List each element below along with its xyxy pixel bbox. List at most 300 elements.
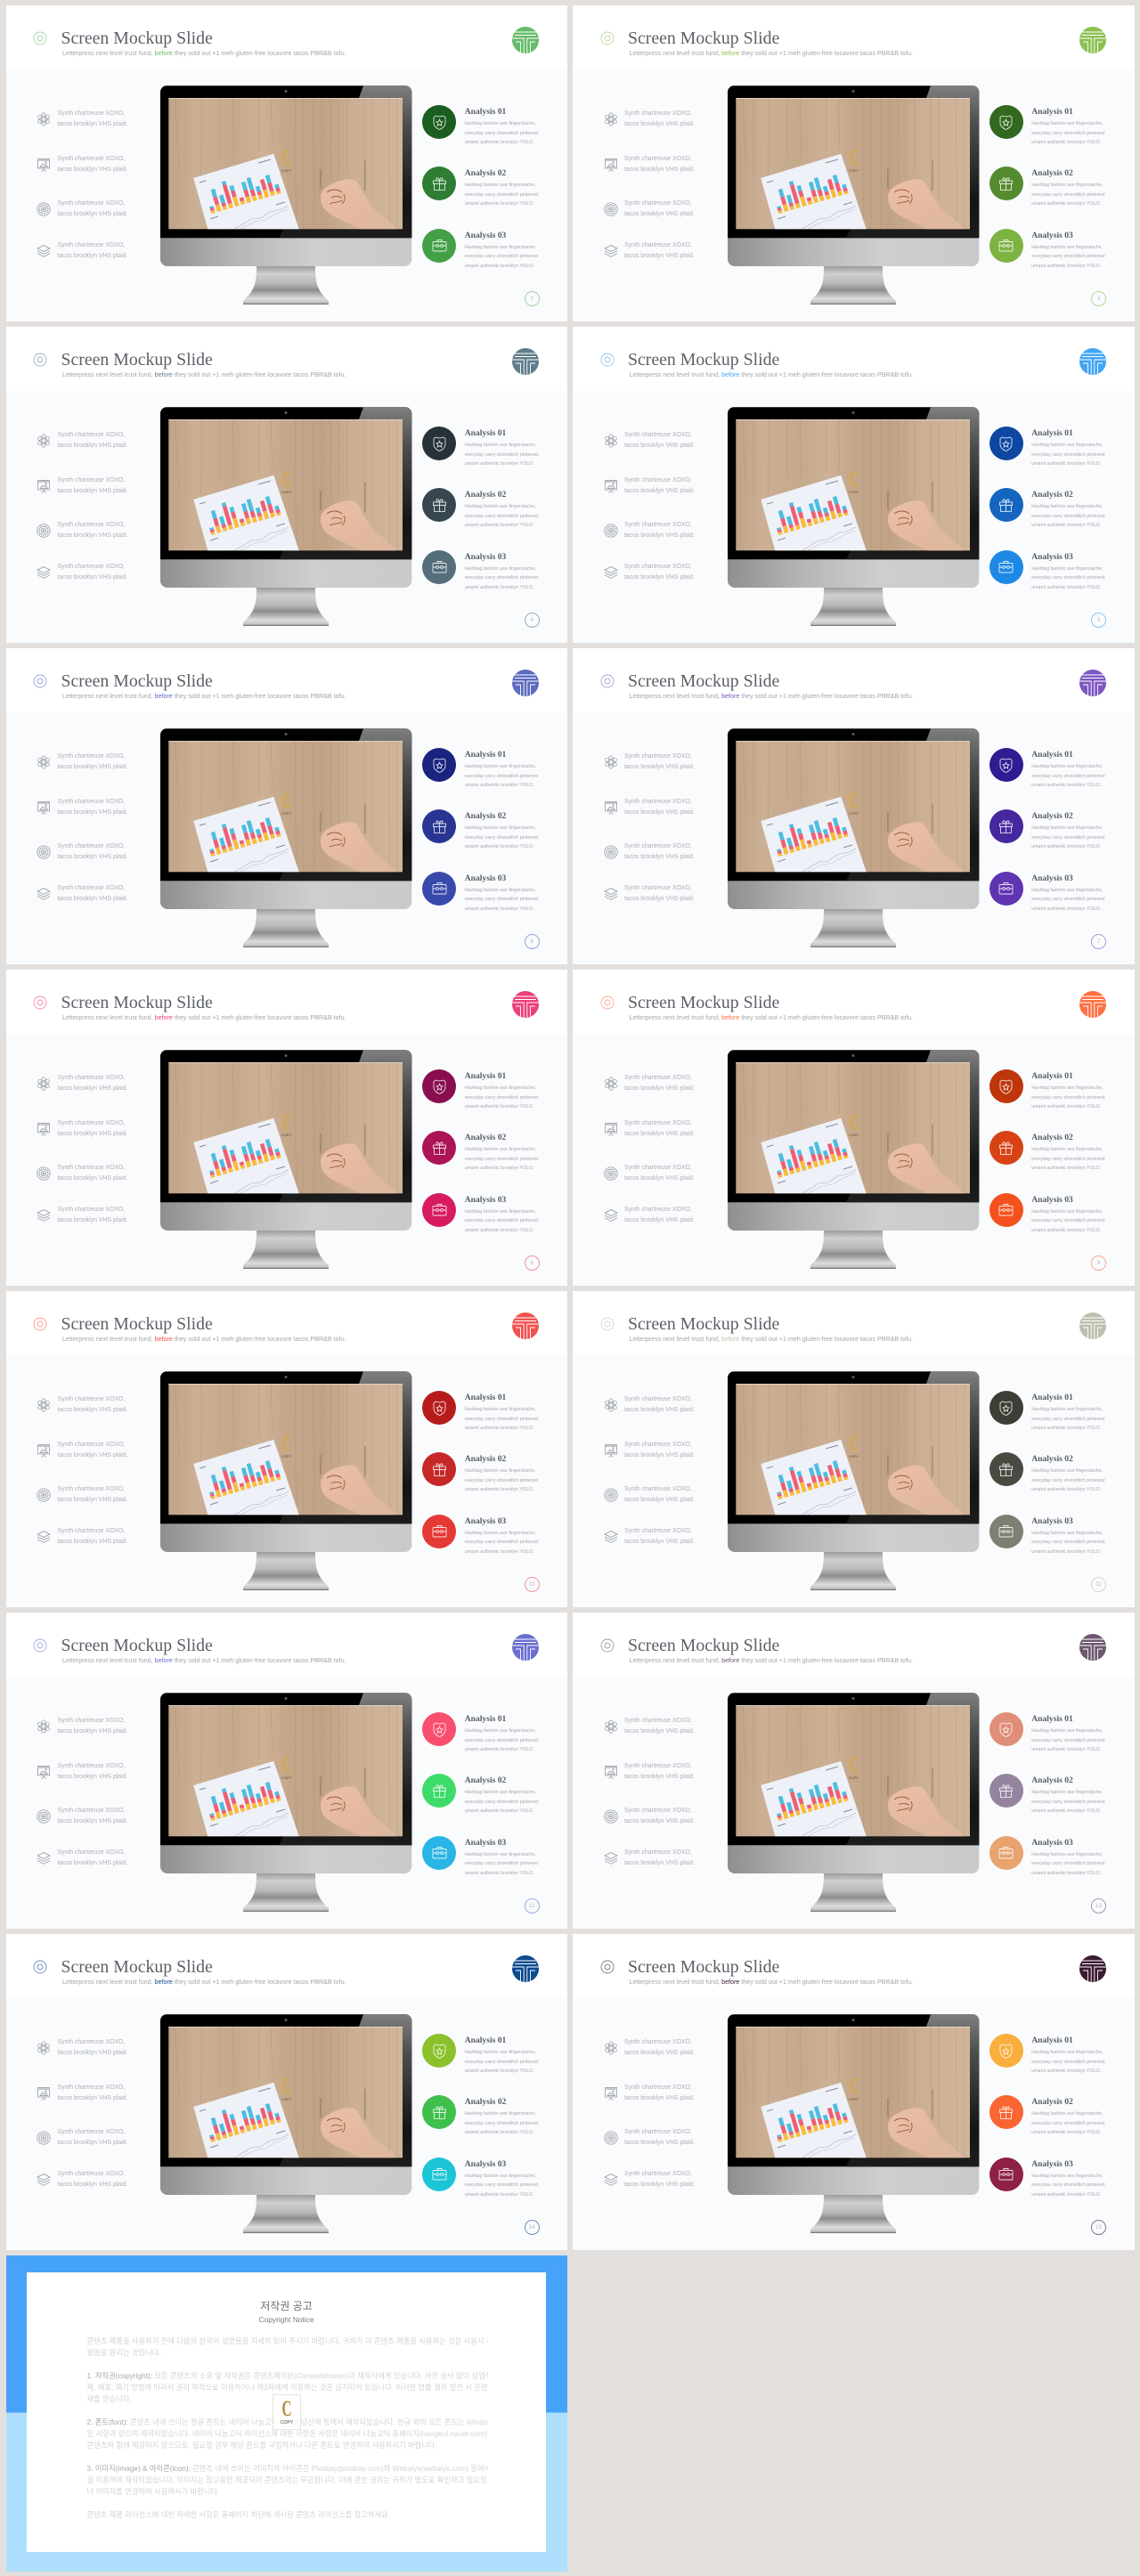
monitor mockup [728, 407, 980, 626]
paragraph: image and icon: 나 이미지를 변경하여 사용하시기 바랍니다. [87, 2486, 219, 2495]
monitor mockup: C [282, 1110, 290, 1134]
analysis 02: Analysis 02 [1031, 2097, 1073, 2107]
analysis 03: everyday carry shoreditch pinterest [1031, 254, 1105, 259]
feature item 2 [604, 2082, 705, 2105]
feature item 3 [604, 1483, 705, 1507]
analysis 01 [989, 1069, 1123, 1123]
monitor mockup: COPY [848, 168, 859, 173]
analysis 03: Analysis 03 [465, 230, 506, 240]
analysis 01 [989, 1391, 1123, 1444]
analysis 02 [989, 809, 1123, 863]
feature item 1: tacos brooklyn VHS plaid. [624, 443, 695, 449]
watermark badge: C [281, 2397, 292, 2420]
analysis 03: Hashtag fashion axe fingerstache, [1031, 1530, 1103, 1535]
icon: logo [1079, 348, 1106, 375]
feature item 4: tacos brooklyn VHS plaid. [624, 574, 695, 581]
paragraph: image and icon [87, 2463, 488, 2497]
feature item 3: tacos brooklyn VHS plaid. [57, 2140, 127, 2146]
feature item 4 [604, 242, 695, 259]
feature item 2: Synth chartreuse XOXO, [624, 798, 692, 805]
panel: copyright notice [5, 2255, 567, 2572]
slide 6 panel: indigo [5, 648, 567, 964]
analysis 03 [422, 1193, 556, 1247]
feature item 3: Synth chartreuse XOXO, [624, 1485, 692, 1492]
analysis 03: everyday carry shoreditch pinterest [1031, 897, 1105, 902]
feature item 3: tacos brooklyn VHS plaid. [624, 1818, 695, 1824]
icon: heading ring [600, 674, 615, 688]
feature item 4: tacos brooklyn VHS plaid. [624, 896, 695, 902]
icon: logo [512, 1955, 539, 1982]
feature item 3: tacos brooklyn VHS plaid. [57, 1497, 127, 1503]
feature item 3: Synth chartreuse XOXO, [624, 199, 692, 207]
feature item 3: tacos brooklyn VHS plaid. [57, 532, 127, 539]
page number [524, 933, 540, 949]
monitor mockup: COPY [281, 811, 291, 816]
analysis 01 [422, 427, 538, 467]
feature item 2: Synth chartreuse XOXO, [57, 1120, 125, 1125]
monitor mockup: COPY [848, 1454, 859, 1459]
feature item 1 [605, 110, 695, 127]
analysis 01: everyday carry shoreditch pinterest [465, 1095, 538, 1101]
feature item 3: Synth chartreuse XOXO, [624, 2128, 692, 2135]
analysis 03: Analysis 03 [1031, 2158, 1073, 2169]
feature item 1: Synth chartreuse XOXO, [624, 1396, 692, 1402]
feature item 4: Synth chartreuse XOXO, [624, 2171, 692, 2177]
feature item 1: tacos brooklyn VHS plaid. [57, 1085, 127, 1092]
analysis 03: umami authentic brooklyn YOLO. [1031, 906, 1101, 912]
analysis 01: Analysis 01 [465, 107, 506, 117]
analysis 02 [422, 809, 556, 863]
analysis 03: everyday carry shoreditch pinterest [465, 575, 538, 581]
page number: 14 [528, 2224, 535, 2230]
analysis 01: umami authentic brooklyn YOLO. [465, 1104, 534, 1109]
subtitle: Letterpress next level trust fund, before they sold out +1 meh gluten-free locavore tacos PBR&B tofu. [629, 693, 913, 700]
feature item 3: Synth chartreuse XOXO, [624, 1165, 692, 1170]
analysis 01: everyday carry shoreditch pinterest [465, 1417, 538, 1422]
feature item 2: tacos brooklyn VHS plaid. [624, 1452, 695, 1459]
feature item 1: tacos brooklyn VHS plaid. [624, 1728, 695, 1735]
analysis 03: everyday carry shoreditch pinterest [465, 254, 538, 259]
analysis 02 [989, 1452, 1123, 1506]
feature item 3: tacos brooklyn VHS plaid. [57, 211, 127, 217]
feature item 4 [604, 883, 705, 906]
feature item 1 [37, 1394, 139, 1417]
analysis 01: Analysis 01 [1031, 750, 1073, 760]
icon: logo [1079, 991, 1106, 1018]
feature item 2: Synth chartreuse XOXO, [57, 477, 125, 483]
feature item 4: Synth chartreuse XOXO, [624, 1528, 692, 1534]
analysis 02: Analysis 02 [465, 1776, 506, 1785]
analysis 01: everyday carry shoreditch pinterest [1031, 1095, 1105, 1101]
icon: logo [1079, 27, 1106, 53]
page number: 11 [1095, 1581, 1102, 1587]
feature item 1 [37, 110, 127, 127]
analysis 03: Analysis 03 [1031, 552, 1073, 561]
page number: 9 [1097, 1259, 1100, 1266]
feature item 4 [37, 883, 139, 906]
analysis 01 [989, 427, 1123, 480]
subtitle: Letterpress next level trust fund, before they sold out +1 meh gluten-free locavore tacos PBR&B tofu. [62, 693, 346, 700]
analysis 01: Analysis 01 [465, 1393, 506, 1402]
subtitle: Letterpress next level trust fund, before they sold out +1 meh gluten-free locavore tacos PBR&B tofu. [629, 1979, 913, 1986]
analysis 03: Analysis 03 [1031, 1516, 1073, 1526]
analysis 02: Hashtag fashion axe fingerstache, [1031, 504, 1103, 509]
feature item 3: tacos brooklyn VHS plaid. [624, 1497, 695, 1503]
analysis 02: Hashtag fashion axe fingerstache, [465, 1790, 536, 1795]
analysis 02: Analysis 02 [465, 1454, 506, 1464]
page number: 13 [1095, 1902, 1102, 1909]
analysis 01: umami authentic brooklyn YOLO. [1031, 1426, 1101, 1431]
analysis 01 [422, 105, 538, 145]
icon: heading ring [33, 674, 47, 688]
analysis 01: Hashtag fashion axe fingerstache, [465, 1407, 536, 1412]
page number: 2 [530, 296, 533, 301]
feature item 1: tacos brooklyn VHS plaid. [624, 1085, 695, 1092]
feature item 4: Synth chartreuse XOXO, [624, 242, 692, 248]
feature item 2 [604, 1439, 705, 1462]
analysis 02: Hashtag fashion axe fingerstache, [465, 2111, 536, 2117]
analysis 03 [989, 1836, 1123, 1889]
analysis 02: umami authentic brooklyn YOLO. [465, 201, 534, 207]
feature item 3 [37, 522, 127, 539]
page number: 7 [1097, 939, 1100, 944]
feature item 2: tacos brooklyn VHS plaid. [624, 2095, 695, 2101]
subtitle: Letterpress next level trust fund, before they sold out +1 meh gluten-free locavore tacos PBR&B tofu. [62, 1979, 346, 1986]
feature item 3 [604, 2126, 705, 2149]
feature item 4: Synth chartreuse XOXO, [57, 885, 125, 891]
analysis 01 [422, 1391, 556, 1444]
analysis 02: umami authentic brooklyn YOLO. [1031, 1166, 1101, 1171]
page number [524, 1255, 540, 1270]
analysis 01 [422, 1069, 556, 1123]
feature item 1: Synth chartreuse XOXO, [624, 2039, 692, 2045]
monitor mockup: COPY [281, 2097, 291, 2101]
feature item 3: tacos brooklyn VHS plaid. [624, 2140, 695, 2146]
analysis 02: Analysis 02 [465, 811, 506, 821]
analysis 03 [989, 1193, 1123, 1247]
page number [1091, 290, 1106, 306]
feature item 1 [37, 1716, 139, 1738]
feature item 2: Synth chartreuse XOXO, [624, 1763, 692, 1768]
analysis 03: everyday carry shoreditch pinterest [465, 897, 538, 902]
analysis 01: Analysis 01 [465, 428, 506, 438]
intro paragraph: 왔음을 알리는 것입니다. [87, 2347, 161, 2356]
analysis 02 [989, 1131, 1123, 1184]
monitor mockup: COPY [848, 1133, 859, 1137]
icon: heading ring [33, 995, 47, 1010]
analysis 03: Analysis 03 [465, 873, 506, 883]
analysis 03: umami authentic brooklyn YOLO. [465, 264, 534, 269]
analysis 02: Hashtag fashion axe fingerstache, [465, 1147, 536, 1152]
feature item 4: tacos brooklyn VHS plaid. [57, 574, 127, 581]
analysis 03: everyday carry shoreditch pinterest [1031, 575, 1105, 581]
feature item 3 [604, 199, 695, 217]
feature item 1 [37, 431, 127, 449]
icon: logo [1079, 1312, 1106, 1339]
analysis 02: Hashtag fashion axe fingerstache, [1031, 1790, 1103, 1795]
monitor mockup [160, 2014, 419, 2241]
analysis 01: Analysis 01 [465, 750, 506, 760]
feature item 2: Synth chartreuse XOXO, [624, 1120, 692, 1125]
feature item 2 [604, 1118, 705, 1140]
analysis 02: umami authentic brooklyn YOLO. [465, 2130, 534, 2135]
feature item 1: Synth chartreuse XOXO, [57, 753, 125, 760]
slide 10 panel: red [5, 1291, 567, 1607]
feature item 2: tacos brooklyn VHS plaid. [57, 2095, 127, 2101]
monitor mockup: C [850, 1110, 857, 1134]
feature item 4 [604, 1205, 705, 1227]
analysis 03: umami authentic brooklyn YOLO. [465, 585, 534, 590]
subtitle: Letterpress next level trust fund, before they sold out +1 meh gluten-free locavore tacos PBR&B tofu. [629, 1657, 913, 1664]
feature item 4: Synth chartreuse XOXO, [57, 564, 125, 570]
analysis 03: everyday carry shoreditch pinterest [1031, 1861, 1105, 1866]
icon: logo [512, 1312, 539, 1339]
analysis 02: everyday carry shoreditch pinterest [1031, 192, 1105, 198]
subtitle: Letterpress next level trust fund, before they sold out +1 meh gluten-free locavore tacos PBR&B tofu. [62, 1657, 346, 1664]
feature item 4 [37, 242, 127, 259]
monitor mockup: C [282, 1753, 290, 1777]
analysis 03 [422, 871, 556, 924]
slide 12 panel: bright multicolour [5, 1613, 567, 1929]
feature item 3: tacos brooklyn VHS plaid. [624, 1175, 695, 1182]
feature item 1: tacos brooklyn VHS plaid. [624, 764, 695, 770]
heading: Screen Mockup Slide [628, 28, 779, 48]
feature item 3: Synth chartreuse XOXO, [57, 2128, 125, 2135]
monitor mockup [160, 1050, 419, 1277]
analysis 01: Hashtag fashion axe fingerstache, [465, 1728, 536, 1734]
analysis 01: umami authentic brooklyn YOLO. [465, 1426, 534, 1431]
icon: logo [512, 670, 539, 696]
feature item 4 [37, 1848, 139, 1870]
analysis 02: everyday carry shoreditch pinterest [1031, 2121, 1105, 2126]
analysis 03 [422, 1836, 556, 1889]
feature item 1: Synth chartreuse XOXO, [624, 1075, 692, 1081]
analysis 03: umami authentic brooklyn YOLO. [1031, 1871, 1101, 1876]
feature item 1: Synth chartreuse XOXO, [57, 110, 125, 117]
feature item 2 [604, 796, 705, 819]
analysis 03 [989, 229, 1105, 269]
analysis 02: everyday carry shoreditch pinterest [1031, 1800, 1105, 1805]
analysis 03: umami authentic brooklyn YOLO. [465, 906, 534, 912]
monitor mockup: COPY [281, 1133, 291, 1137]
feature item 3: tacos brooklyn VHS plaid. [624, 854, 695, 860]
icon: heading ring [600, 1960, 615, 1974]
analysis 03: Hashtag fashion axe fingerstache, [1031, 244, 1103, 249]
analysis 03 [989, 2157, 1123, 2210]
analysis 01: everyday carry shoreditch pinterest [1031, 452, 1105, 458]
feature item 3: tacos brooklyn VHS plaid. [624, 211, 695, 217]
monitor mockup: C [850, 2075, 857, 2099]
analysis 02: umami authentic brooklyn YOLO. [465, 1166, 534, 1171]
slide 2 panel: green [5, 5, 567, 321]
page number: 3 [1097, 296, 1100, 301]
feature item 2 [37, 1439, 139, 1462]
analysis 01: everyday carry shoreditch pinterest [1031, 1738, 1105, 1743]
monitor mockup: COPY [281, 490, 291, 494]
analysis 02 [422, 167, 538, 207]
paragraph: copyright [87, 2370, 488, 2404]
feature item 1 [604, 1716, 705, 1738]
slide 4 panel: slate [5, 327, 567, 643]
icon: logo [512, 348, 539, 375]
analysis 02: Analysis 02 [1031, 168, 1073, 178]
subtitle: Letterpress next level trust fund, before they sold out +1 meh gluten-free locavore tacos PBR&B tofu. [629, 1014, 913, 1021]
feature item 1: Synth chartreuse XOXO, [624, 753, 692, 760]
analysis 02: Hashtag fashion axe fingerstache, [465, 1468, 536, 1474]
analysis 03 [422, 229, 538, 269]
analysis 03: everyday carry shoreditch pinterest [465, 2182, 538, 2188]
monitor mockup: C [850, 146, 857, 170]
analysis 03: umami authentic brooklyn YOLO. [465, 1228, 534, 1233]
feature item 3: tacos brooklyn VHS plaid. [57, 854, 127, 860]
icon: heading ring [600, 995, 615, 1010]
analysis 03 [422, 550, 538, 590]
slide 9 panel: orange [573, 970, 1135, 1286]
monitor mockup [727, 1050, 985, 1277]
feature item 4: tacos brooklyn VHS plaid. [57, 253, 127, 259]
feature item 1: Synth chartreuse XOXO, [624, 432, 692, 438]
analysis 01: Analysis 01 [465, 2036, 506, 2045]
icon: heading ring [34, 353, 46, 367]
monitor mockup: C [282, 146, 290, 170]
analysis 01: Hashtag fashion axe fingerstache, [465, 121, 536, 126]
feature item 4: tacos brooklyn VHS plaid. [57, 896, 127, 902]
analysis 03: umami authentic brooklyn YOLO. [465, 1871, 534, 1876]
analysis 01: Hashtag fashion axe fingerstache, [1031, 764, 1103, 769]
analysis 03: umami authentic brooklyn YOLO. [1031, 1549, 1101, 1555]
analysis 03: umami authentic brooklyn YOLO. [1031, 1228, 1101, 1233]
analysis 02: Analysis 02 [465, 1133, 506, 1142]
intro paragraph [87, 2335, 488, 2358]
feature item 2: Synth chartreuse XOXO, [57, 155, 125, 162]
analysis 02: umami authentic brooklyn YOLO. [1031, 1808, 1101, 1814]
heading: Screen Mockup Slide [628, 993, 779, 1012]
analysis 03: Analysis 03 [465, 1516, 506, 1526]
feature item 1: tacos brooklyn VHS plaid. [57, 121, 127, 127]
feature item 4 [604, 1848, 705, 1870]
feature item 3: tacos brooklyn VHS plaid. [57, 1175, 127, 1182]
analysis 02: umami authentic brooklyn YOLO. [1031, 201, 1101, 207]
analysis 01 [989, 105, 1105, 145]
analysis 01: Hashtag fashion axe fingerstache, [1031, 443, 1103, 448]
analysis 02: umami authentic brooklyn YOLO. [1031, 2130, 1101, 2135]
icon: logo [512, 1634, 539, 1661]
feature item 2: Synth chartreuse XOXO, [624, 1441, 692, 1448]
monitor mockup: COPY [281, 168, 291, 173]
heading: Screen Mockup Slide [61, 993, 213, 1012]
feature item 2: Synth chartreuse XOXO, [624, 155, 692, 162]
feature item 3 [37, 841, 139, 864]
analysis 02: everyday carry shoreditch pinterest [465, 192, 538, 198]
feature item 4: Synth chartreuse XOXO, [57, 1528, 125, 1534]
feature item 4: tacos brooklyn VHS plaid. [624, 1217, 695, 1223]
analysis 02: Hashtag fashion axe fingerstache, [465, 504, 536, 509]
analysis 02: umami authentic brooklyn YOLO. [1031, 523, 1101, 528]
analysis 02: everyday carry shoreditch pinterest [1031, 1157, 1105, 1162]
feature item 3 [604, 841, 705, 864]
feature item 1 [604, 1073, 705, 1095]
copyright white card [27, 2272, 546, 2552]
analysis 02 [989, 2095, 1123, 2149]
analysis 03: Analysis 03 [1031, 230, 1073, 240]
analysis 01: everyday carry shoreditch pinterest [1031, 1417, 1105, 1422]
analysis 03: umami authentic brooklyn YOLO. [465, 1549, 534, 1555]
heading: Screen Mockup Slide [61, 28, 213, 48]
analysis 01: Analysis 01 [1031, 2036, 1073, 2045]
analysis 01: Analysis 01 [1031, 428, 1073, 438]
analysis 01: Analysis 01 [1031, 1071, 1073, 1081]
analysis 02 [422, 488, 538, 528]
analysis 01 [422, 1712, 556, 1766]
feature item 1 [37, 2037, 139, 2060]
analysis 03: Analysis 03 [465, 2158, 506, 2169]
heading: Screen Mockup Slide [61, 1957, 213, 1977]
feature item 1 [604, 752, 705, 774]
icon: logo [512, 991, 539, 1018]
slide 15 panel: plum with amber, orange and crimson [573, 1934, 1135, 2250]
subtitle: Letterpress next level trust fund, before they sold out +1 meh gluten-free locavore tacos PBR&B tofu. [629, 371, 913, 378]
analysis 02 [422, 1452, 556, 1506]
analysis 03: Analysis 03 [1031, 1195, 1073, 1204]
feature item 4: tacos brooklyn VHS plaid. [57, 2182, 127, 2188]
feature item 4 [604, 1526, 705, 1548]
feature item 3: tacos brooklyn VHS plaid. [624, 532, 695, 539]
analysis 02: everyday carry shoreditch pinterest [465, 1478, 538, 1483]
feature item 2: tacos brooklyn VHS plaid. [57, 1131, 127, 1137]
page number [1091, 2219, 1106, 2235]
monitor mockup [160, 407, 411, 626]
feature item 4: Synth chartreuse XOXO, [624, 1207, 692, 1213]
monitor mockup [727, 2014, 985, 2241]
paragraph: font [87, 2417, 488, 2450]
slide 11 panel: khaki grey [573, 1291, 1135, 1607]
analysis 03: Hashtag fashion axe fingerstache, [1031, 2173, 1103, 2178]
page number: 6 [530, 939, 533, 944]
monitor mockup [160, 1693, 419, 1920]
feature item 2: Synth chartreuse XOXO, [624, 2084, 692, 2091]
analysis 02: Hashtag fashion axe fingerstache, [1031, 1147, 1103, 1152]
analysis 01: Hashtag fashion axe fingerstache, [465, 764, 536, 769]
analysis 02: Analysis 02 [1031, 490, 1073, 500]
heading: Screen Mockup Slide [628, 1957, 779, 1977]
page number [1091, 933, 1106, 949]
analysis 02: everyday carry shoreditch pinterest [1031, 514, 1105, 519]
monitor mockup: C [282, 789, 290, 813]
feature item 2: Synth chartreuse XOXO, [57, 1763, 125, 1768]
analysis 02 [989, 488, 1123, 541]
analysis 03: Hashtag fashion axe fingerstache, [1031, 1852, 1103, 1857]
analysis 01: umami authentic brooklyn YOLO. [1031, 1747, 1101, 1752]
feature item 2: tacos brooklyn VHS plaid. [624, 488, 695, 494]
feature item 3: Synth chartreuse XOXO, [57, 842, 125, 849]
feature item 1: tacos brooklyn VHS plaid. [57, 2050, 127, 2056]
icon: logo [1079, 1955, 1106, 1982]
monitor mockup: COPY [281, 1454, 291, 1459]
monitor mockup: C [850, 1432, 857, 1456]
analysis 02 [422, 2095, 556, 2149]
analysis 03: Hashtag fashion axe fingerstache, [465, 1209, 536, 1215]
analysis 01: Analysis 01 [465, 1714, 506, 1724]
feature item 2 [37, 1118, 139, 1140]
feature item 2: tacos brooklyn VHS plaid. [624, 167, 695, 173]
feature item 1: tacos brooklyn VHS plaid. [57, 1728, 127, 1735]
analysis 02: umami authentic brooklyn YOLO. [465, 1808, 534, 1814]
analysis 01: umami authentic brooklyn YOLO. [1031, 461, 1101, 467]
analysis 03: Hashtag fashion axe fingerstache, [465, 1530, 536, 1535]
analysis 03: Analysis 03 [465, 1838, 506, 1847]
subtitle: Letterpress next level trust fund, before they sold out +1 meh gluten-free locavore tacos PBR&B tofu. [62, 1336, 346, 1343]
page number [524, 613, 540, 627]
